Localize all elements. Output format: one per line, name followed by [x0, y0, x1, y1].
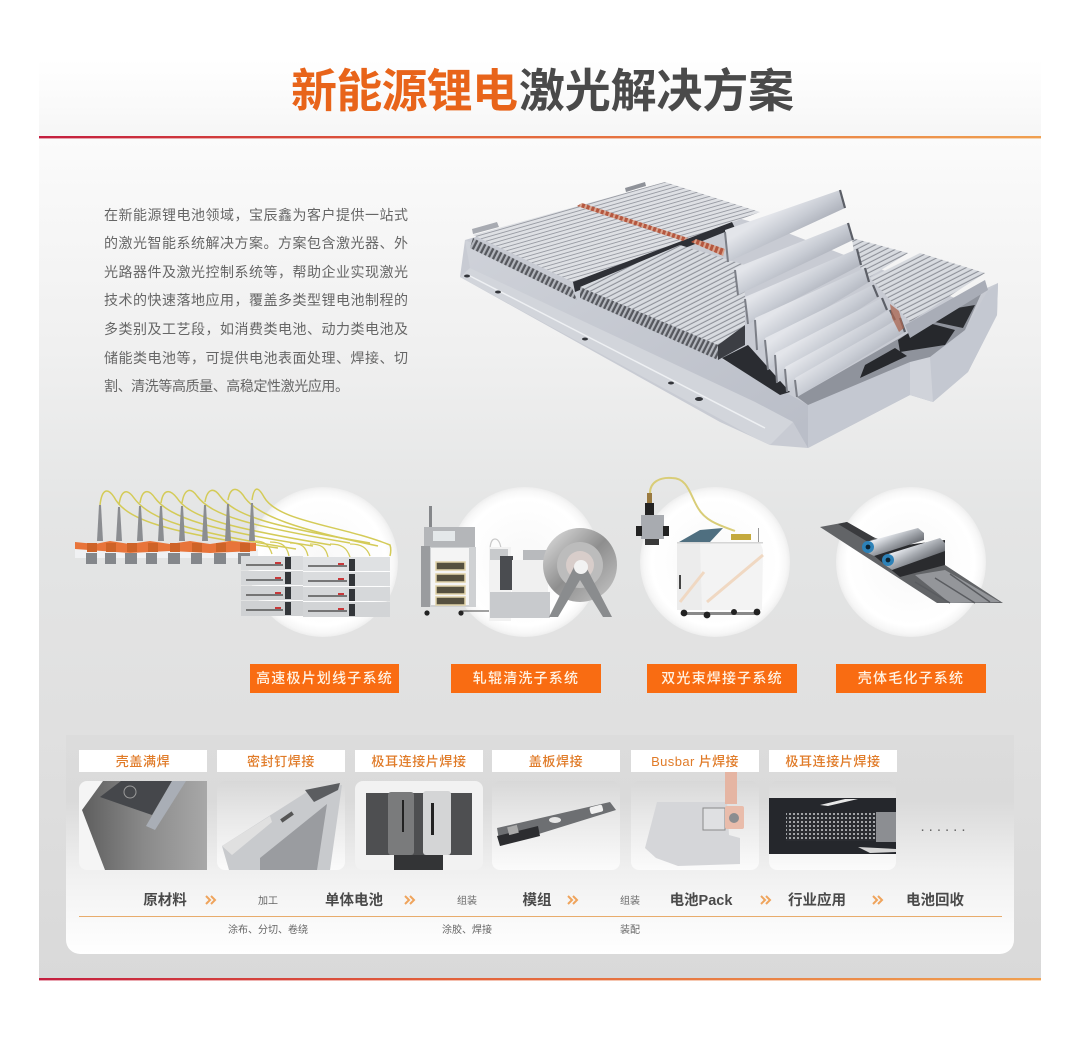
subsystem label 2: 轧辊清洗子系统: [473, 670, 579, 686]
weld card 5: [631, 750, 759, 870]
subsystem label 1: [250, 664, 399, 693]
title: 新能源锂电: [291, 65, 518, 117]
intro paragraph: 在新能源锂电池领域，宝辰鑫为客户提供一站式: [104, 207, 408, 223]
weld card 5: Busbar 片焊接: [651, 754, 739, 769]
flow sub-notes: 涂胶、焊接: [442, 923, 492, 936]
battery pack illustration: [460, 182, 998, 448]
intro paragraph: [104, 207, 408, 394]
process flow: 原材料: [143, 892, 187, 909]
weld card 2: [217, 750, 345, 870]
intro paragraph: 的激光智能系统解决方案。方案包含激光器、外: [104, 235, 408, 251]
process flow: [143, 891, 964, 909]
weld card 2: 密封钉焊接: [247, 754, 315, 769]
subsystem label 4: 壳体毛化子系统: [858, 670, 964, 686]
subsystem orb 2: [450, 487, 600, 637]
background panel: [39, 138, 1041, 979]
weld card 4: 盖板焊接: [529, 754, 583, 769]
weld card 6: 极耳连接片焊接: [785, 754, 881, 769]
weld card 3: 极耳连接片焊接: [371, 754, 467, 769]
process flow: 电池回收: [906, 892, 964, 909]
weld card 6: [769, 750, 897, 870]
intro paragraph: 光路器件及激光控制系统等，帮助企业实现激光: [104, 264, 408, 280]
subsystem orb 4: [836, 487, 986, 637]
weld card 3: [355, 750, 483, 870]
lower process panel: [66, 735, 1014, 954]
housing texturing system illustration: [820, 522, 1003, 603]
flow sub-notes: [228, 923, 640, 936]
bottom rule: [39, 978, 1041, 980]
weld card 1: [79, 750, 207, 870]
weld card 1: 壳盖满焊: [116, 754, 170, 769]
intro paragraph: 割、清洗等高质量、高稳定性激光应用。: [104, 378, 349, 394]
ellipsis: ......: [920, 818, 970, 835]
roll cleaning system illustration: [421, 506, 617, 621]
laser scribing system illustration: [75, 489, 391, 617]
header band: [39, 60, 1041, 137]
subsystem orb 1: [248, 487, 398, 637]
process flow: 组装: [457, 894, 477, 907]
weld card 4: [492, 750, 620, 870]
flow sub-notes: 装配: [620, 923, 640, 936]
process flow: 单体电池: [325, 892, 383, 909]
intro paragraph: 技术的快速落地应用，覆盖多类型锂电池制程的: [104, 292, 408, 308]
flow sub-notes: 涂布、分切、卷绕: [228, 923, 308, 936]
subsystem orb 3: [640, 487, 790, 637]
top rule: [39, 136, 1041, 138]
intro paragraph: 多类别及工艺段，如消费类电池、动力类电池及: [104, 321, 408, 337]
dual-beam welding system illustration: [636, 478, 763, 618]
intro paragraph: 储能类电池等，可提供电池表面处理、焊接、切: [104, 350, 408, 366]
process flow: 模组: [522, 891, 552, 909]
process flow: 电池Pack: [670, 892, 733, 909]
subsystem label 3: 双光束焊接子系统: [661, 670, 783, 686]
process flow: 行业应用: [788, 891, 846, 909]
title: dark part: 激光解决方案: [519, 65, 794, 117]
subsystem label 2: [451, 664, 601, 693]
subsystem label 3: [647, 664, 797, 693]
subsystem label 1: 高速极片划线子系统: [256, 670, 393, 686]
process flow: 组装: [620, 894, 640, 907]
flow divider: [79, 916, 1002, 917]
subsystem label 4: [836, 664, 986, 693]
process flow: 加工: [258, 895, 278, 907]
